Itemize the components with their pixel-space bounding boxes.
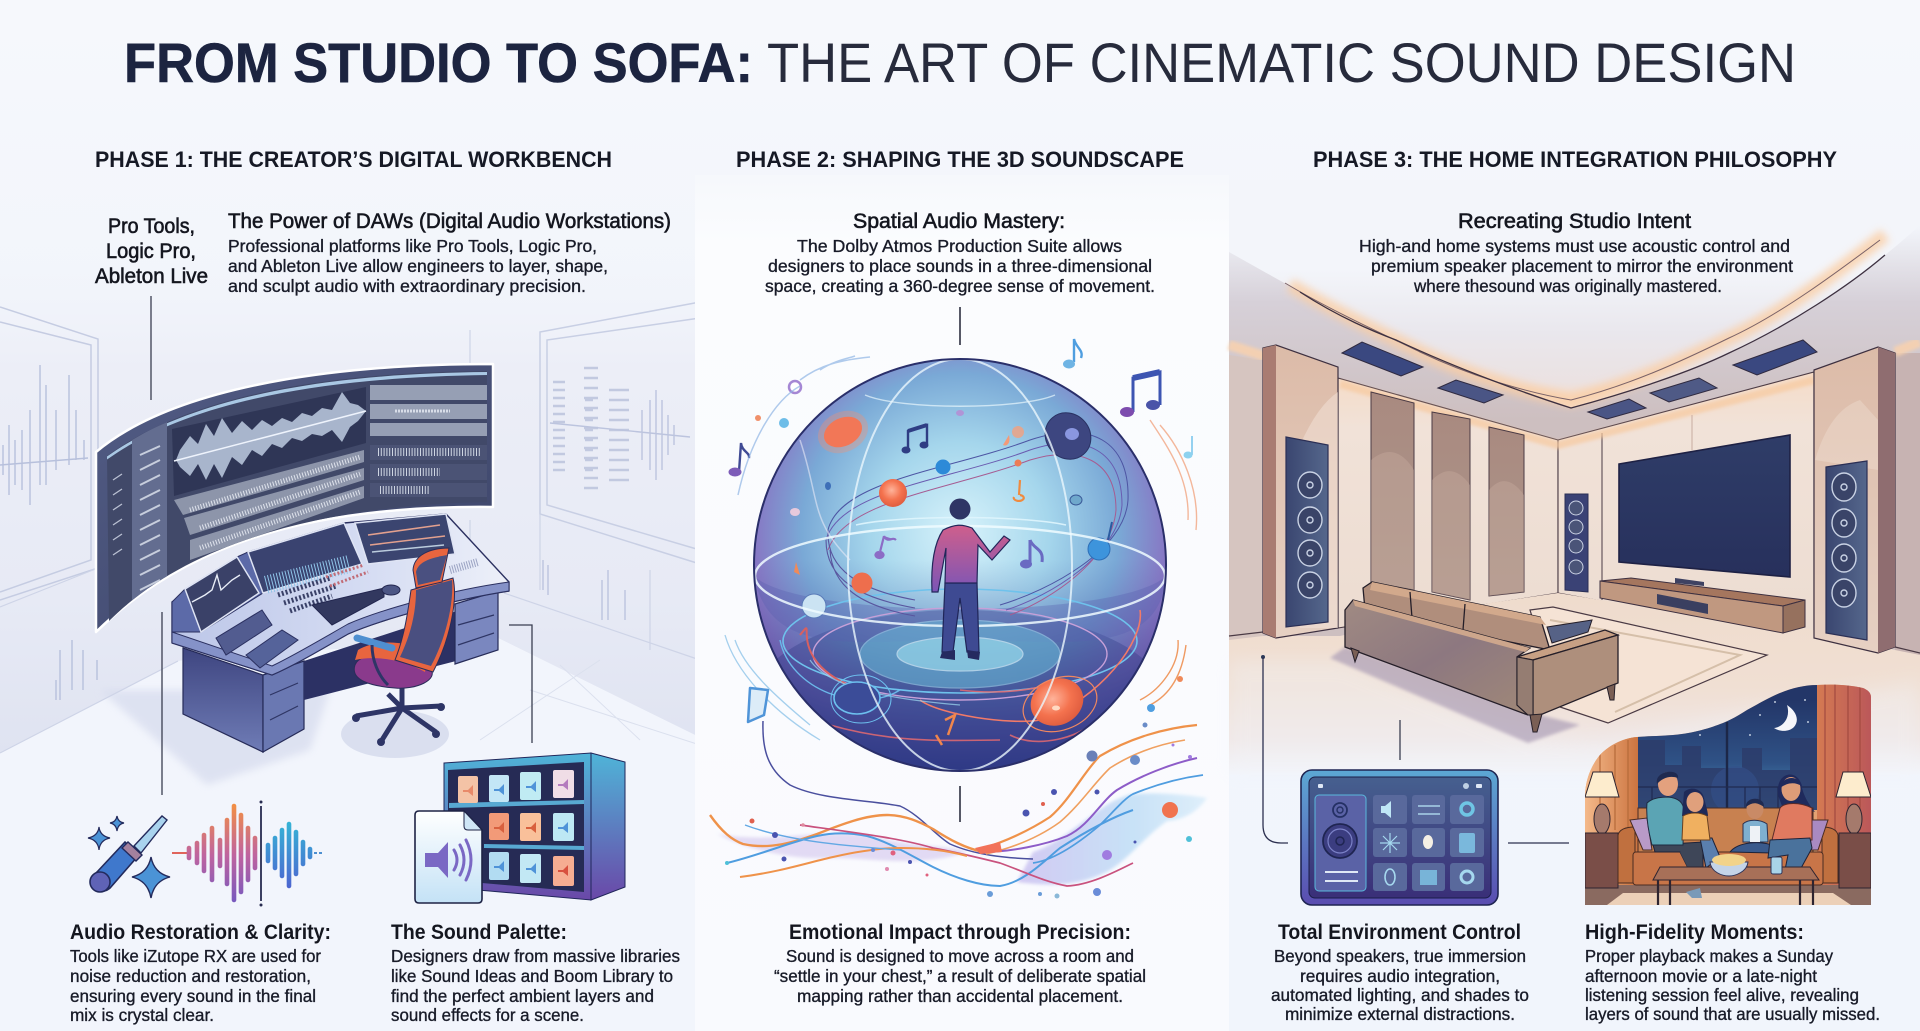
phase 2 background [695, 175, 1229, 1031]
panel: phase 1 workbench [0, 147, 700, 1031]
heading: phase 3: PHASE 3: THE HOME INTEGRATION PHILOSOPHY [1313, 147, 1837, 172]
title: THE ART OF CINEMATIC SOUND DESIGN [767, 31, 1796, 94]
illustration: flowing sound waves [710, 721, 1207, 898]
text block: recreating studio intent: premium speaker placement to mirror the environment [1371, 256, 1793, 276]
heading: phase 2: PHASE 2: SHAPING THE 3D SOUNDSCAPE [736, 147, 1184, 172]
label: pro tools logic pro ableton live [95, 215, 208, 288]
icon: colorful waveform [172, 800, 323, 906]
text block: emotional impact: Emotional Impact through Precision: [789, 921, 1131, 944]
text block: spatial audio mastery: space, creating a 360-degree sense of movement. [765, 276, 1155, 296]
illustration: spatial audio sphere [754, 359, 1166, 790]
illustration: home theater room [1229, 180, 1920, 775]
text block: power of DAWs [228, 210, 671, 296]
icon: sound library shelf [415, 753, 625, 903]
text block: spatial audio mastery: The Dolby Atmos Production Suite allows [797, 236, 1122, 256]
text block: recreating studio intent: High-and home systems must use acoustic control and [1359, 236, 1790, 256]
text block: total environment control: automated lighting, and shades to [1271, 985, 1529, 1005]
text block: total environment control: minimize external distractions. [1285, 1004, 1515, 1024]
illustration: family scene [1580, 680, 1875, 910]
text block: emotional impact: mapping rather than accidental placement. [797, 986, 1123, 1006]
text block: spatial audio mastery: Spatial Audio Mastery: [853, 210, 1065, 233]
connector: text to sphere [959, 307, 961, 345]
text block: audio restoration [70, 921, 331, 1025]
text block: audio restoration: mix is crystal clear. [70, 1005, 214, 1025]
text block: sound palette: The Sound Palette: [391, 921, 567, 944]
connector: label to monitor [150, 296, 152, 400]
text block: spatial audio mastery: designers to place sounds in a three-dimensional [768, 256, 1152, 276]
text block: high-fidelity moments [1585, 921, 1880, 1024]
illustration: curved monitor [96, 360, 500, 640]
title: FROM STUDIO TO SOFA: [124, 31, 753, 94]
text block: total environment control: requires audio integration, [1300, 966, 1500, 986]
label: pro tools logic pro ableton live: Ableton Live [95, 265, 208, 288]
connector: desk to restoration [161, 612, 163, 795]
connector: sphere to text [959, 786, 961, 822]
heading: phase 1: PHASE 1: THE CREATOR’S DIGITAL WORKBENCH [95, 147, 612, 172]
text block: audio restoration: Audio Restoration & Clarity: [70, 921, 331, 944]
text block: audio restoration: ensuring every sound in the final [70, 986, 316, 1006]
text block: high-fidelity moments: High-Fidelity Moments: [1585, 921, 1804, 944]
connector: room to tablet [1399, 720, 1401, 760]
icon: control tablet [1301, 770, 1498, 905]
text block: spatial audio mastery [765, 210, 1155, 296]
text block: high-fidelity moments: listening session feel alive, revealing [1585, 985, 1859, 1005]
text block: power of DAWs: The Power of DAWs (Digital Audio Workstations) [228, 210, 671, 233]
panel: phase 3 home integration [1229, 147, 1920, 1024]
text block: high-fidelity moments: afternoon movie or a late-night [1585, 966, 1817, 986]
text block: emotional impact [774, 921, 1146, 1006]
connector: tablet to family scene [1508, 842, 1569, 844]
text block: power of DAWs: and sculpt audio with extraordinary precision. [228, 276, 586, 296]
icons: floating music notes [725, 339, 1197, 740]
text block: sound palette [391, 921, 680, 1025]
text block: high-fidelity moments: layers of sound that are usually missed. [1585, 1004, 1880, 1024]
text block: sound palette: Designers draw from massive libraries [391, 946, 680, 966]
panel: phase 2 soundscape [695, 147, 1229, 1031]
text block: audio restoration: Tools like iZutope RX are used for [70, 946, 321, 966]
text block: audio restoration: noise reduction and restoration, [70, 966, 311, 986]
text block: high-fidelity moments: Proper playback makes a Sunday [1585, 946, 1833, 966]
phase 1 studio room backdrop [0, 240, 700, 1031]
illustration: desk with monitors [172, 514, 509, 752]
title [124, 31, 1796, 94]
icon: restoration tool and sparkles [88, 816, 170, 898]
text block: power of DAWs: Professional platforms like Pro Tools, Logic Pro, [228, 236, 597, 256]
text block: sound palette: like Sound Ideas and Boom Library to [391, 966, 673, 986]
text block: recreating studio intent: Recreating Studio Intent [1458, 210, 1691, 233]
connector: room curve to tablet [1261, 655, 1288, 843]
text block: sound palette: find the perfect ambient layers and [391, 986, 654, 1006]
label: pro tools logic pro ableton live: Logic Pro, [106, 240, 196, 263]
text block: recreating studio intent [1359, 210, 1793, 296]
text block: power of DAWs: and Ableton Live allow engineers to layer, shape, [228, 256, 608, 276]
figure: listener [932, 498, 1010, 660]
text block: total environment control: Total Environment Control [1278, 921, 1521, 944]
text block: recreating studio intent: where thesound was originally mastered. [1413, 276, 1722, 296]
text block: total environment control: Beyond speakers, true immersion [1274, 946, 1526, 966]
text block: total environment control [1271, 921, 1529, 1024]
text block: emotional impact: “settle in your chest,” a result of deliberate spatial [774, 966, 1146, 986]
connector: desk to sound palette [509, 625, 532, 743]
text block: sound palette: sound effects for a scene. [391, 1005, 584, 1025]
illustration: office chair [341, 548, 454, 758]
label: pro tools logic pro ableton live: Pro Tools, [108, 215, 195, 238]
text block: emotional impact: Sound is designed to move across a room and [786, 946, 1134, 966]
